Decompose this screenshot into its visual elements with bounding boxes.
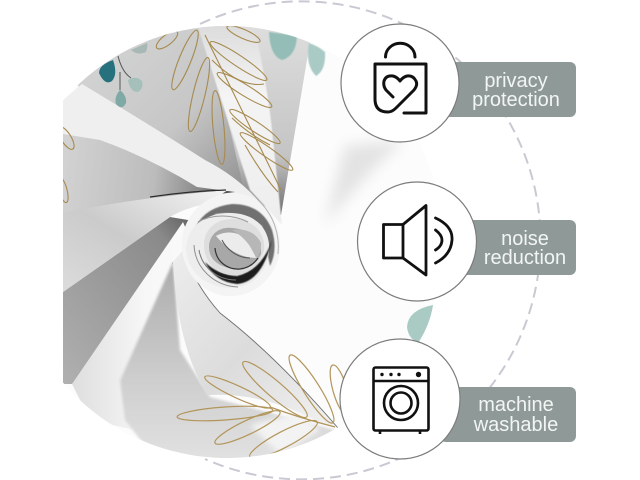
label: noise reduction bbox=[450, 220, 576, 275]
left grey wedge bbox=[63, 134, 235, 214]
lower left white band bbox=[72, 222, 195, 430]
bottom grey wedge bbox=[120, 262, 335, 470]
inner grey core bbox=[209, 228, 261, 269]
fold highlight bottom bbox=[252, 416, 318, 452]
label: machine washable bbox=[440, 387, 576, 442]
grey wedge upper centre bbox=[228, 27, 310, 215]
upper left white fold bbox=[63, 84, 259, 202]
centre petal bbox=[216, 233, 258, 258]
bottom black crescent bbox=[205, 240, 272, 284]
dashed circle outline bbox=[200, 1, 541, 479]
icon circle: speaker bbox=[358, 182, 476, 301]
grey wedge with teal leaves bbox=[78, 27, 243, 186]
fold shadow line bbox=[196, 282, 338, 428]
outer white band bbox=[182, 200, 262, 284]
label: privacy protection: protection bbox=[472, 89, 560, 111]
label: noise reduction: noise bbox=[501, 228, 549, 250]
second band bbox=[196, 213, 270, 258]
lower fold bbox=[173, 250, 338, 428]
lower left grey wedge bbox=[63, 217, 200, 384]
central rosette bbox=[182, 200, 279, 288]
gold leaves bottom bbox=[176, 354, 344, 457]
icon circle: privacy bag bbox=[341, 24, 459, 142]
spiral lines bbox=[194, 245, 238, 287]
icon circle: washing machine bbox=[340, 339, 460, 459]
left white band bbox=[63, 190, 228, 292]
fold shading under circle bbox=[328, 140, 396, 214]
third band bbox=[204, 219, 264, 275]
fabric base bbox=[63, 20, 453, 465]
band dark edge bbox=[150, 190, 226, 197]
white highlight stripe bbox=[197, 24, 282, 225]
teal leaves top bbox=[99, 32, 325, 107]
teal leaf right bbox=[407, 305, 433, 343]
fabric swirl photo bbox=[63, 26, 400, 458]
label: machine washable: washable bbox=[473, 414, 558, 436]
top shadow crescent bbox=[196, 204, 275, 266]
label: machine washable: machine bbox=[478, 394, 554, 416]
label: privacy protection: privacy bbox=[484, 70, 548, 92]
label: noise reduction: reduction bbox=[484, 247, 566, 269]
label: privacy protection bbox=[440, 62, 576, 117]
gold leaves top bbox=[55, 23, 296, 204]
